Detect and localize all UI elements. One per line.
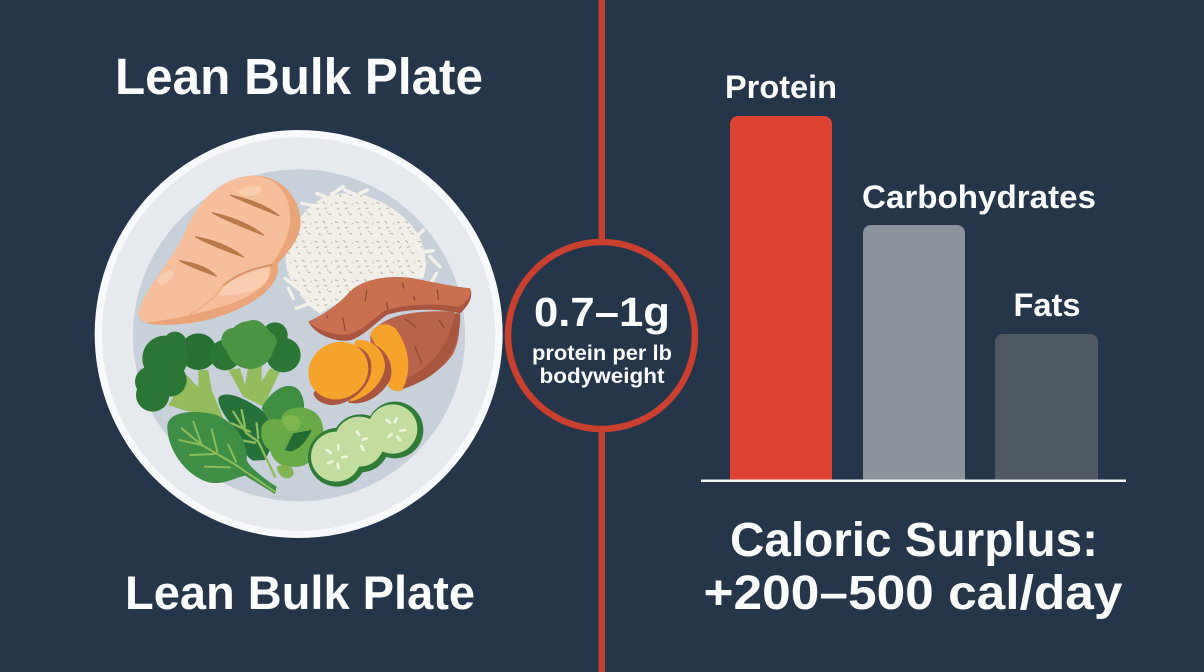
bottom caption: Lean Bulk Plate [125, 566, 475, 619]
green leaf cluster [261, 407, 323, 467]
bar: protein [730, 116, 832, 480]
label: fats: Fats [1014, 287, 1080, 323]
chart baseline [701, 480, 1126, 482]
bar chart: macronutrients [701, 69, 1126, 482]
potato body [370, 311, 459, 391]
bar: fats [995, 334, 1098, 480]
plate [95, 130, 503, 538]
bar: carbohydrates [863, 225, 965, 480]
caloric surplus heading: Caloric Surplus: [730, 514, 1098, 567]
protein amount: 0.7–1g [534, 289, 670, 335]
title: Lean Bulk Plate [115, 48, 483, 105]
round green leaf [262, 386, 304, 423]
rice [285, 187, 440, 313]
label: protein: Protein [725, 69, 837, 105]
cucumber slices [308, 402, 423, 487]
label: carbohydrates: Carbohydrates [862, 179, 1096, 215]
front spinach leaf [167, 412, 277, 494]
protein unit line 2: bodyweight [540, 365, 664, 388]
chicken breast [138, 176, 301, 325]
protein unit line 1: protein per lb [532, 342, 672, 365]
panel: plate illustration [95, 130, 503, 538]
sweet potato [297, 277, 471, 411]
broccoli crowns [135, 320, 301, 412]
caloric surplus value: +200–500 cal/day [704, 567, 1123, 620]
callout: protein target [508, 242, 695, 429]
broccoli stems [168, 365, 280, 418]
dark spinach leaf [218, 395, 273, 461]
vertical divider line [598, 0, 605, 672]
broccoli and greens [135, 320, 323, 494]
sweet potato slices [297, 324, 408, 411]
